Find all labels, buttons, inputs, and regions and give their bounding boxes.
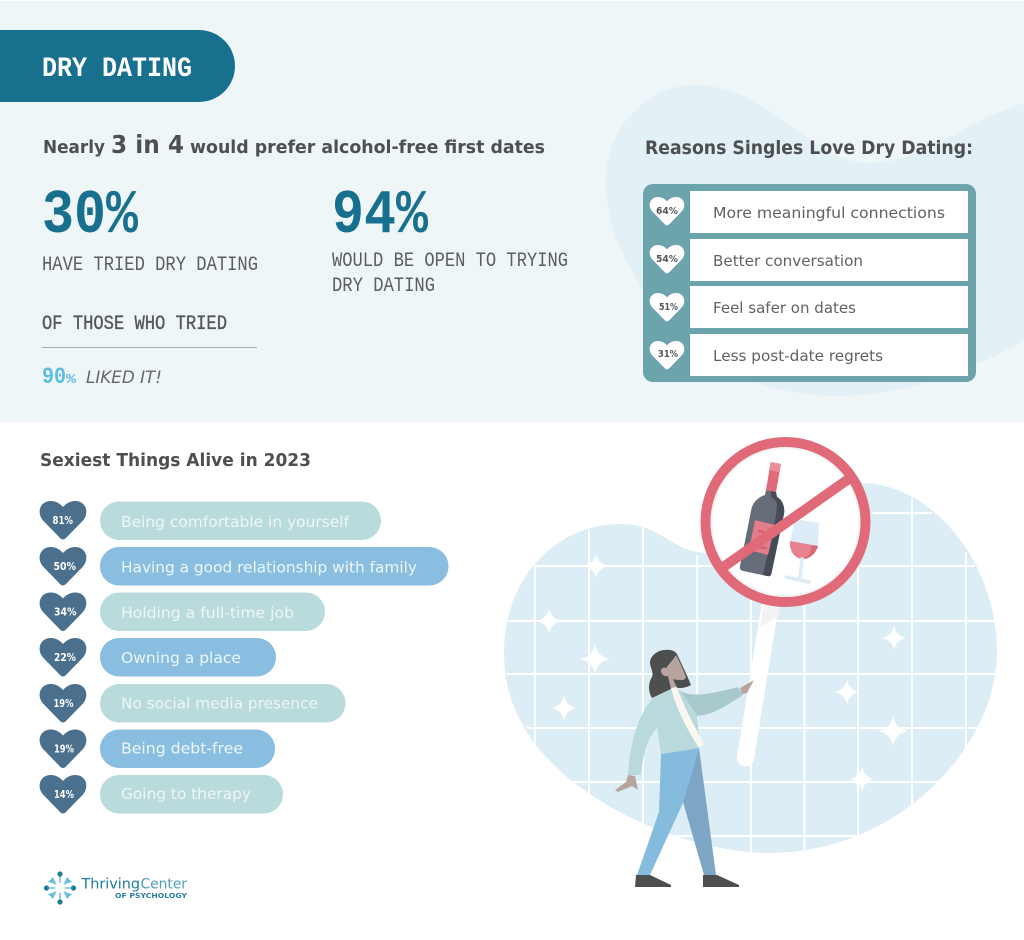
stat: 94 percent: 94% [332, 180, 429, 251]
panel: dry dating summary [0, 1, 1024, 422]
stat: of those who tried [42, 313, 257, 390]
stat: 30 percent: 30% [42, 180, 139, 251]
hands [615, 680, 754, 792]
icon: wine bottle [740, 462, 784, 576]
stat: of those who tried: % [66, 372, 77, 388]
stat: 94 percent: WOULD BE OPEN TO TRYING [332, 250, 568, 273]
row: therapy: Going to therapy [121, 785, 251, 803]
stat: 30 percent [42, 180, 258, 277]
row: debt-free [40, 730, 275, 768]
heading: 3 in 4 [43, 130, 545, 159]
front leg [637, 748, 699, 875]
row: family: 50% [54, 561, 76, 573]
reason: better conversation: 54% [656, 254, 678, 265]
stat: of those who tried: OF THOSE WHO TRIED [42, 313, 227, 336]
chart: sexiest things list [40, 501, 448, 814]
row: job [40, 592, 325, 631]
title banner [0, 30, 235, 102]
row: comfortable [40, 501, 381, 540]
heading: sexiest things: Sexiest Things Alive in 2023 [40, 450, 311, 471]
row: therapy: 14% [54, 789, 74, 801]
heading: 3 in 4: would prefer alcohol-free first dates [190, 137, 545, 158]
row: debt-free: 19% [54, 744, 74, 756]
illustration: no alcohol sign [706, 442, 866, 602]
heading: reasons: Reasons Singles Love Dry Dating: [645, 137, 973, 159]
stat: 94 percent: DRY DATING [332, 275, 435, 298]
reason: feel safer: 51% [659, 302, 678, 313]
row: social media: 19% [54, 698, 74, 710]
reason: meaningful connections: More meaningful connections [713, 204, 945, 222]
stat: of those who tried: 90 [42, 364, 66, 390]
row: comfortable: 81% [52, 515, 73, 527]
row: social media [40, 684, 345, 722]
illustration: woman [615, 650, 754, 887]
reason: less regrets: Less post-date regrets [713, 347, 883, 365]
row: therapy [40, 775, 283, 814]
row: family [40, 547, 448, 586]
back leg [683, 748, 716, 875]
strap [671, 687, 704, 748]
neck and face [661, 655, 686, 689]
reason: feel safer [650, 286, 968, 328]
heading: 3 in 4: 3 in 4 [111, 130, 184, 159]
title banner: DRY DATING [42, 54, 192, 85]
reason: better conversation [650, 239, 968, 281]
stat: of those who tried: LIKED IT! [86, 368, 162, 387]
torso and left arm [628, 689, 700, 775]
row: job: 34% [54, 606, 77, 618]
reason: less regrets [650, 334, 968, 376]
stat: 94 percent [332, 180, 568, 298]
row: debt-free: Being debt-free [121, 740, 243, 758]
illustration: background blob with grid [504, 483, 997, 853]
reason: meaningful connections: 64% [656, 206, 678, 217]
reason: feel safer: Feel safer on dates [713, 299, 856, 317]
reason: better conversation: Better conversation [713, 252, 863, 270]
row: comfortable: Being comfortable in yourself [121, 513, 350, 531]
logo: Center [140, 876, 187, 892]
hair [649, 650, 691, 698]
row: place: Owning a place [121, 649, 241, 667]
right arm [678, 687, 743, 716]
row: place [40, 638, 276, 676]
icon: wine glass [786, 519, 819, 582]
row: place: 22% [54, 652, 76, 664]
reason: meaningful connections [650, 191, 968, 233]
icon: starburst [44, 871, 76, 905]
row: family: Having a good relationship with family [121, 558, 417, 576]
logo [44, 871, 188, 905]
illustration: sparkles [537, 554, 908, 791]
reason: less regrets: 31% [658, 349, 678, 360]
heading: 3 in 4: Nearly [43, 137, 105, 158]
row: job: Holding a full-time job [121, 604, 294, 622]
panel: reasons list [643, 184, 976, 382]
stat: 30 percent: HAVE TRIED DRY DATING [42, 254, 258, 277]
illustration: sign post [746, 600, 780, 758]
logo: Thriving [81, 876, 140, 892]
row: social media: No social media presence [121, 694, 318, 712]
logo: OF PSYCHOLOGY [115, 892, 188, 900]
shoes [635, 875, 739, 887]
